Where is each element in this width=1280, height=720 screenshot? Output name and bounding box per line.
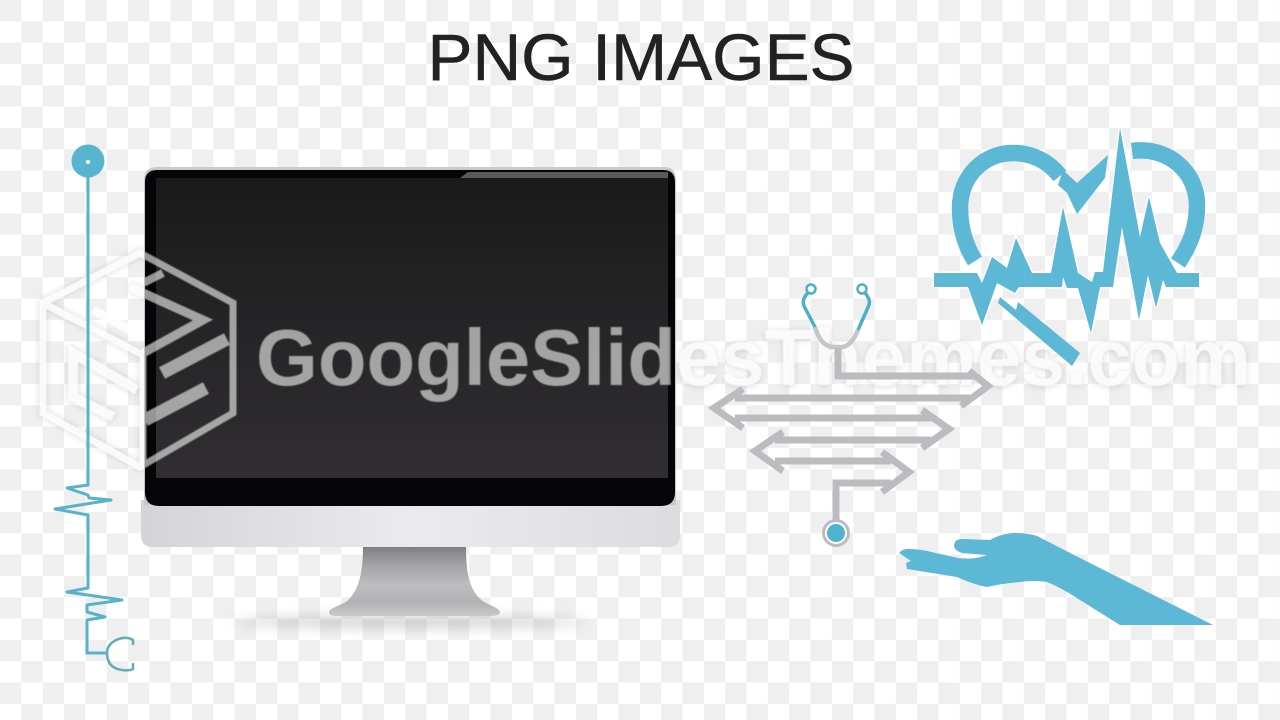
snake arrows xyxy=(714,348,988,520)
watermark white shapes: GoogleSlidesThemes.com xyxy=(256,313,1251,402)
ECG line xyxy=(55,170,122,653)
stethoscope arc xyxy=(107,638,133,670)
watermark over monitor xyxy=(145,251,672,469)
heart right arc xyxy=(1132,150,1197,263)
monitor stand xyxy=(329,547,500,616)
watermark over background xyxy=(43,253,1251,467)
screen reflection xyxy=(460,172,668,178)
end node xyxy=(824,520,848,546)
heart notch xyxy=(1058,155,1108,214)
heart left arc xyxy=(960,153,1060,261)
monitor shadow xyxy=(235,617,585,627)
icon: desktop monitor xyxy=(141,167,680,627)
stethoscope tubes xyxy=(803,290,815,327)
watermark white shapes xyxy=(43,253,1251,467)
icon: left ECG line with stethoscope xyxy=(55,144,133,670)
title: PNG IMAGES xyxy=(428,20,854,94)
ECG pulse xyxy=(934,128,1199,333)
icon: heart with ECG pulse xyxy=(934,128,1199,366)
black bezel xyxy=(145,170,675,506)
watermark text: GoogleSlidesThemes.com xyxy=(256,313,1251,402)
watermark logo xyxy=(43,253,233,467)
monitor chin xyxy=(141,500,680,547)
monitor frame xyxy=(144,167,676,505)
icon: arrow tree with stethoscope xyxy=(714,284,988,546)
icon: open hand xyxy=(899,533,1213,625)
heart lower segment xyxy=(998,297,1080,366)
watermark shadow: GoogleSlidesThemes.com xyxy=(256,314,1251,403)
watermark shadow xyxy=(43,253,1251,467)
screen xyxy=(156,178,668,478)
top node xyxy=(72,144,104,178)
